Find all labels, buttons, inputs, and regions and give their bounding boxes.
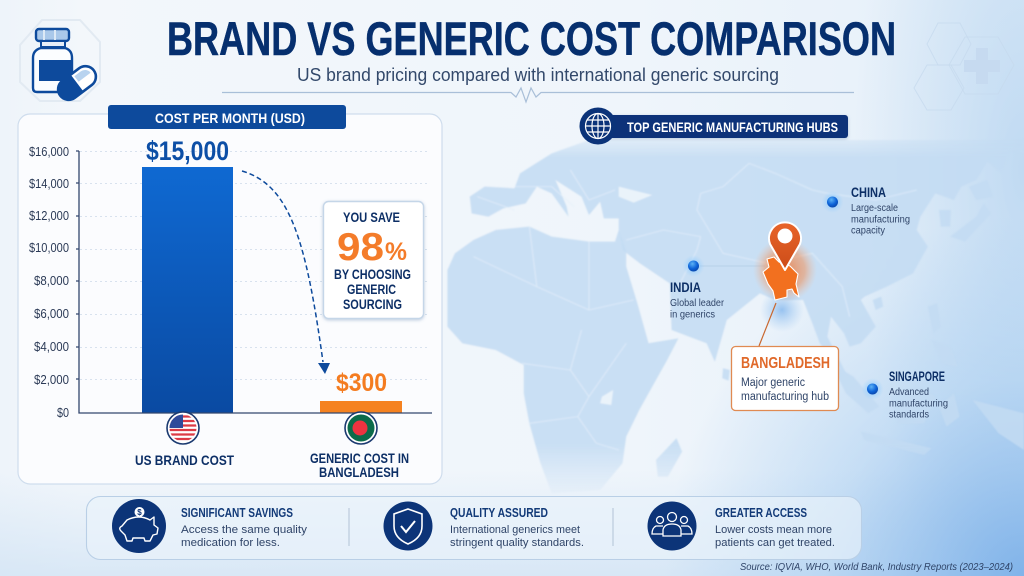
icon: globe [580,108,616,144]
icon: piggy bank: $ [137,508,142,517]
callout: you save 98%: SOURCING [343,297,402,312]
map marker: China: CHINA [851,185,886,200]
benefit: significant savings: SIGNIFICANT SAVINGS [181,506,293,520]
map marker: Bangladesh highlight [732,222,838,410]
label: generic cost in Bangladesh [310,450,409,480]
heading: top generic manufacturing hubs [580,108,848,144]
map marker: India [670,255,765,320]
label: generic cost in Bangladesh: BANGLADESH [319,464,399,480]
arrow: dashed savings curve [242,171,330,374]
benefit: greater access: GREATER ACCESS [715,506,807,520]
callout: you save 98%: YOU SAVE [343,210,400,225]
icon: US flag [167,412,199,444]
map marker: Singapore: Advanced [889,387,929,398]
benefit: quality assured: stringent quality standards. [450,537,584,549]
bar chart: $6,000 [34,306,69,321]
map marker: China: manufacturing [851,214,910,226]
label: US brand cost: US BRAND COST [135,452,234,468]
bar chart: $2,000 [34,372,69,387]
callout: Bangladesh: Major generic [741,377,805,389]
chart header: COST PER MONTH (USD) [155,110,305,126]
header icon: bottle and pill [20,20,100,104]
bar chart: $16,000 [29,144,69,159]
map marker: India: INDIA [670,280,701,295]
chart header [108,105,346,129]
map marker: India: in generics [670,310,715,320]
callout: Bangladesh [732,346,838,410]
bar: generic [320,401,402,413]
benefit: quality assured: International generics meet [450,524,580,536]
value: generic: $300 [336,369,387,397]
bar chart: $14,000 [29,176,69,191]
map marker: Singapore [862,369,948,420]
icon: piggy bank [112,499,166,553]
bar chart: $12,000 [29,208,69,223]
map marker: China: capacity [851,226,885,236]
bar: US brand [142,167,233,413]
benefit: quality assured [384,502,584,550]
heading: top generic manufacturing hubs: TOP GENERIC MANUFACTURING HUBS [627,119,838,135]
callout: you save 98%: BY CHOOSING [334,267,411,282]
bar chart: $0 [57,405,69,420]
benefit: significant savings: medication for less. [181,537,280,549]
benefit: greater access [648,502,835,550]
callout: Bangladesh: BANGLADESH [741,355,830,372]
callout: you save 98% [324,202,424,318]
icon: shield [384,502,432,550]
value: US brand: $15,000 [146,136,229,166]
benefit: greater access: Lower costs mean more [715,524,832,536]
map marker: Singapore: SINGAPORE [889,369,945,384]
benefit: significant savings: Access the same quality [181,524,308,536]
icon: people [648,502,696,550]
subtitle: US brand pricing compared with international generic sourcing [297,65,779,85]
icon: Bangladesh flag [345,412,377,444]
callout: you save 98%: % [385,238,407,266]
bar chart: $4,000 [34,339,69,354]
benefit: greater access: patients can get treated. [715,537,835,549]
callout: Bangladesh: manufacturing hub [741,391,829,403]
benefit: quality assured: QUALITY ASSURED [450,506,548,520]
label: generic cost in Bangladesh: GENERIC COST IN [310,450,409,466]
callout: you save 98%: GENERIC [347,282,396,297]
decorative hexagons with cross [914,23,1014,110]
world map background [447,140,1024,493]
callout: you save 98%: 98 [337,226,384,269]
panel: benefits strip [86,496,862,560]
panel: cost per month chart [18,105,442,484]
bar chart [29,136,432,420]
map marker: Singapore: manufacturing [889,398,948,410]
bar chart: $8,000 [34,273,69,288]
benefit: significant savings [112,499,308,553]
icon: location pin [769,222,801,270]
map marker: Singapore: standards [889,410,929,420]
map marker: India: Global leader [670,298,725,309]
Bangladesh shape [763,257,799,300]
bar chart: $10,000 [29,240,69,255]
map marker: China [822,185,910,236]
map marker: China: Large-scale [851,203,898,214]
